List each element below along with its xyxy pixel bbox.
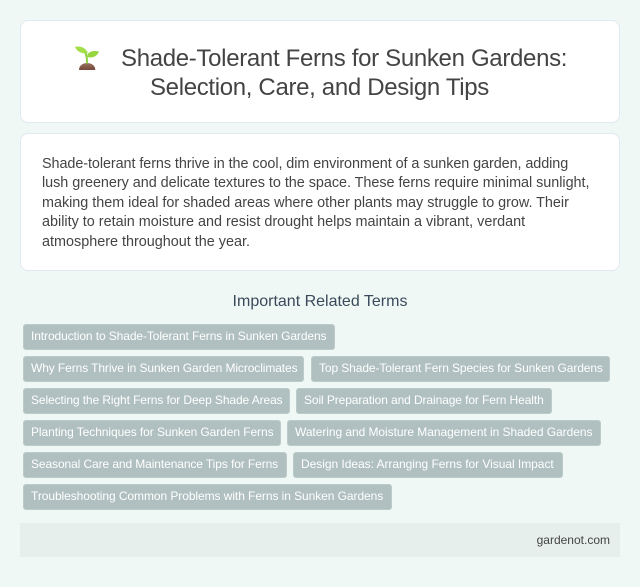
pill [23,324,335,350]
pill: Soil Preparation and Drainage for Fern Health [304,393,544,407]
footer bar [20,523,620,557]
pill: Introduction to Shade-Tolerant Ferns in Sunken Gardens [31,329,326,343]
heading line 2: Selection, Care, and Design Tips [150,74,489,101]
pill: Seasonal Care and Maintenance Tips for Ferns [31,457,278,471]
pill [23,484,392,510]
pill: Watering and Moisture Management in Shaded Gardens [295,425,592,439]
pill [311,356,610,382]
description text: lush greenery and delicate textures to the space. These ferns require minimal sunlight, [42,175,589,191]
pill: Why Ferns Thrive in Sunken Garden Microclimates [31,361,298,375]
description text: Shade-tolerant ferns thrive in the cool, dim environment of a sunken garden, adding [42,156,568,172]
pill [287,420,601,446]
panel: description [20,133,620,271]
pill: Design Ideas: Arranging Ferns for Visual Impact [301,457,554,471]
description text: atmosphere throughout the year. [42,234,250,250]
description text [42,156,589,250]
heading: related terms: Important Related Terms [233,293,407,310]
pill [23,452,287,478]
icon: seedling [75,46,99,70]
panel: term pills [23,324,610,510]
pill: Troubleshooting Common Problems with Ferns in Sunken Gardens [31,489,383,503]
panel: title card [20,20,620,123]
pill [23,420,281,446]
footer source: gardenot.com [537,533,610,547]
pill: Selecting the Right Ferns for Deep Shade Areas [31,393,283,407]
pill: Planting Techniques for Sunken Garden Ferns [31,425,274,439]
pill [23,356,304,382]
pill [296,388,552,414]
description text: ability to retain moisture and resist drought helps maintain a vibrant, verdant [42,214,525,230]
pill [23,388,290,414]
pill [293,452,563,478]
heading line 1: Shade-Tolerant Ferns for Sunken Gardens: [121,45,567,72]
pill: Top Shade-Tolerant Fern Species for Sunken Gardens [319,361,603,375]
description text: making them ideal for shaded areas where other plants may struggle to grow. Their [42,195,569,211]
